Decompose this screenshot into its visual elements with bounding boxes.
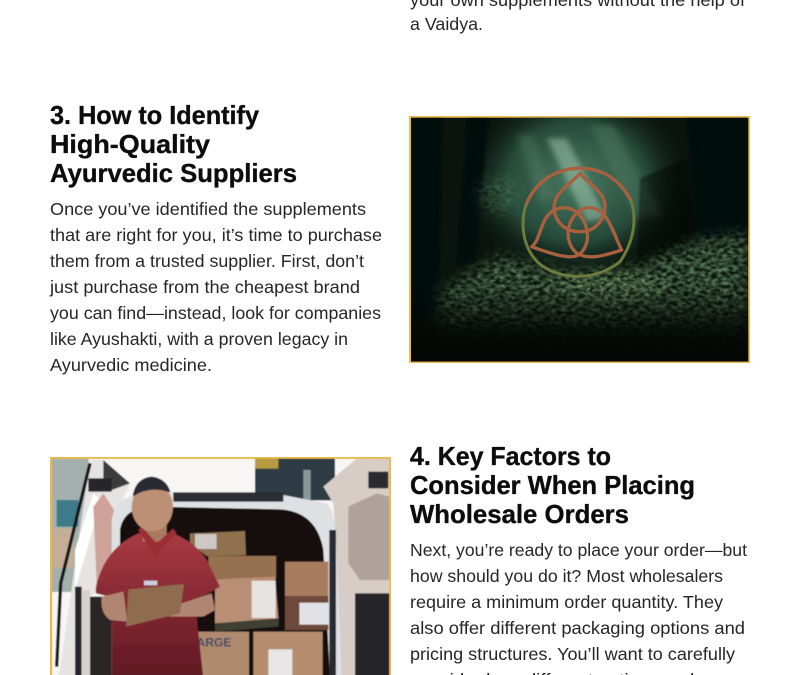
cap bbox=[133, 477, 171, 497]
heading: section 4: Consider When Placing bbox=[410, 470, 695, 500]
text block: section 3: that are right for you, it’s time to purchase bbox=[50, 225, 382, 245]
heading: section 3: Ayurvedic Suppliers bbox=[50, 158, 297, 188]
text block: section 3: them from a trusted supplier. First, don’t bbox=[50, 251, 364, 271]
heading: section 4 bbox=[410, 441, 695, 529]
heading: section 3: 3. How to Identify bbox=[50, 100, 260, 130]
worker bbox=[96, 477, 220, 675]
heading: section 4: Wholesale Orders bbox=[410, 499, 629, 529]
clipboard bbox=[126, 584, 184, 627]
left van door bbox=[57, 460, 130, 675]
text block: section 3: Once you’ve identified the supplements bbox=[50, 199, 366, 219]
intro text ending bbox=[410, 0, 745, 34]
face and neck bbox=[143, 522, 167, 542]
text block: section 3: Ayurvedic medicine. bbox=[50, 355, 212, 375]
text block: section 4: also offer different packaging options and bbox=[410, 618, 745, 638]
heading: section 4: 4. Key Factors to bbox=[410, 441, 611, 471]
text block: section 4: Next, you’re ready to place your order—but bbox=[410, 540, 747, 560]
foliage bbox=[433, 174, 748, 330]
van frame bbox=[112, 493, 342, 675]
light rays bbox=[517, 125, 663, 222]
text block: section 4: require a minimum order quantity. They bbox=[410, 592, 723, 612]
image: forest with triple-ring herbal symbol bbox=[409, 116, 750, 363]
cardboard boxes bbox=[190, 531, 329, 675]
image: delivery worker with clipboard at open van bbox=[50, 457, 391, 675]
intro text ending: a Vaidya. bbox=[410, 14, 483, 34]
cardboard boxes: ARGE bbox=[197, 636, 231, 650]
ring symbol bbox=[523, 168, 634, 276]
heading: section 3: High-Quality bbox=[50, 129, 211, 159]
text block: section 4: pricing structures. You’ll want to carefully bbox=[410, 644, 735, 664]
street background bbox=[52, 459, 89, 592]
text block: section 3: you can find—instead, look for companies bbox=[50, 303, 381, 323]
light glow behind symbol bbox=[482, 118, 674, 267]
dark tree trunks bbox=[411, 118, 748, 294]
text block: section 4 bbox=[410, 540, 747, 675]
worker shirt bbox=[96, 533, 220, 675]
arms bbox=[101, 592, 127, 622]
text block: section 3: like Ayushakti, with a proven legacy in bbox=[50, 329, 348, 349]
right van door bbox=[323, 459, 389, 675]
text block: section 3 bbox=[49, 199, 382, 375]
text block: section 4: how should you do it? Most wholesalers bbox=[410, 566, 723, 586]
heading: section 3 bbox=[50, 100, 297, 188]
text block: section 3: just purchase from the cheapest brand bbox=[49, 277, 360, 297]
